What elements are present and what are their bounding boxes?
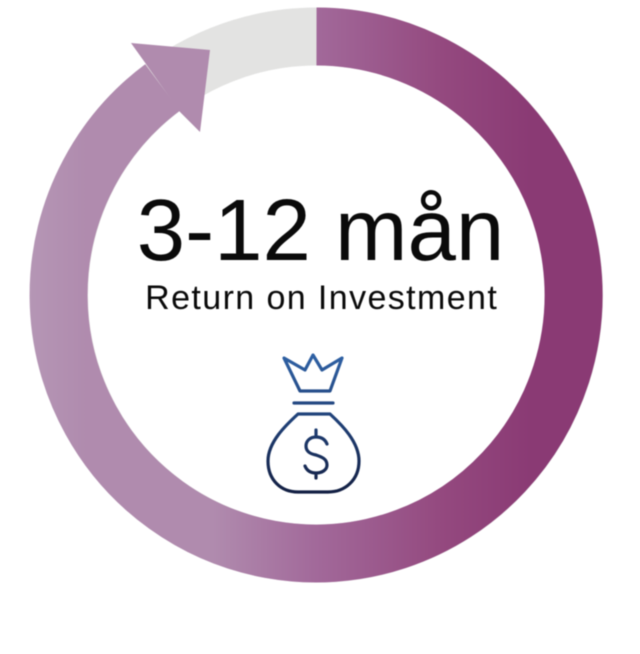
- ring progress: purple arc with arrow: [59, 36, 574, 553]
- subtitle: Return on Investment: [145, 279, 498, 317]
- ring track: remaining grey segment: [59, 36, 574, 554]
- arrow head: [131, 43, 210, 132]
- icon: dollar sign: [305, 430, 327, 478]
- icon: money bag with crown: [268, 355, 359, 492]
- icon: bag body: [268, 414, 359, 492]
- icon: bag tie: [294, 401, 333, 405]
- main figure: 3-12 mån: [137, 182, 504, 279]
- icon: crown: [284, 355, 342, 391]
